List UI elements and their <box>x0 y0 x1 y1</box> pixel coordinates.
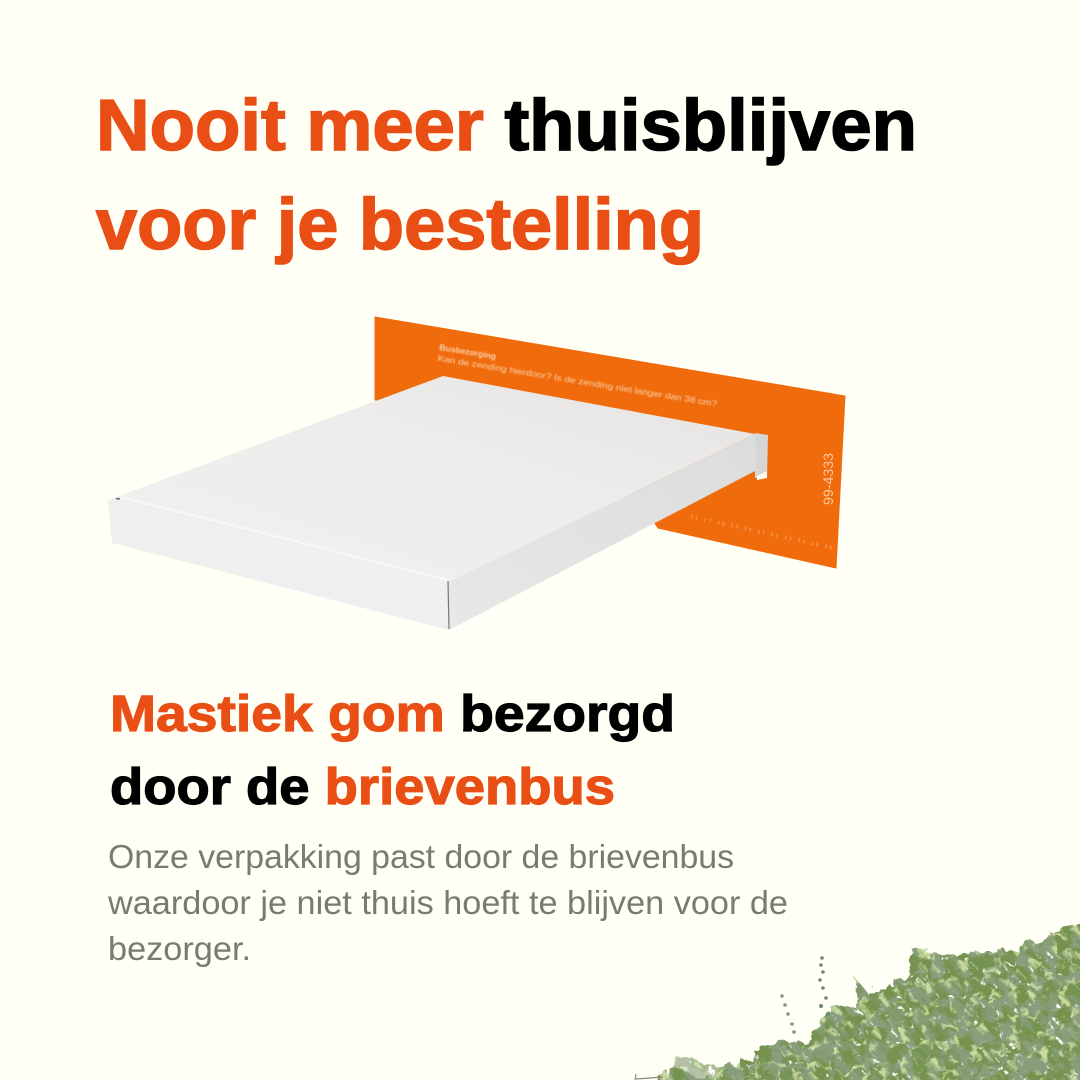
letterbox slot <box>755 433 768 478</box>
subheading line 1: Mastiek gom bezorgd <box>110 685 675 742</box>
heading line 1: Nooit meer thuisblijven <box>96 86 917 166</box>
body text: Onze verpakking past door de brievenbus <box>108 838 734 875</box>
tree in bottom right corner <box>635 915 1080 1080</box>
body text: bezorger. <box>108 930 251 967</box>
product photo: box through orange letterbox gauge <box>108 317 845 630</box>
gauge caption <box>437 342 720 409</box>
tree foliage <box>650 915 1080 1080</box>
thin branch sprig left <box>780 994 796 1034</box>
subheading line 2: door de brievenbus <box>110 758 615 815</box>
body text <box>107 838 788 967</box>
slot opening highlight <box>757 471 767 480</box>
box long side <box>448 434 757 630</box>
thin branch sprig right <box>818 956 830 1016</box>
ruler numbers: 21 27 28 29 30 31 32 33 34 35 36 <box>690 514 833 551</box>
gauge caption: Kan de zending hierdoor? Is de zending niet langer dan 38 cm? <box>437 353 718 409</box>
heading line 2: voor je bestelling <box>96 185 704 265</box>
box corner edge <box>448 581 449 629</box>
box front fold line <box>121 497 448 580</box>
gauge caption: Busbezorging <box>439 342 497 361</box>
gauge code number: 99-4333 <box>821 453 836 505</box>
dark twig <box>635 1074 663 1080</box>
orange gauge panel <box>375 317 845 568</box>
subheading <box>110 685 675 815</box>
body text: waardoor je niet thuis hoeft te blijven voor de <box>107 884 788 921</box>
box top face <box>108 376 755 582</box>
box corner nick <box>116 498 120 500</box>
main heading <box>96 86 917 265</box>
box front side <box>108 500 449 630</box>
